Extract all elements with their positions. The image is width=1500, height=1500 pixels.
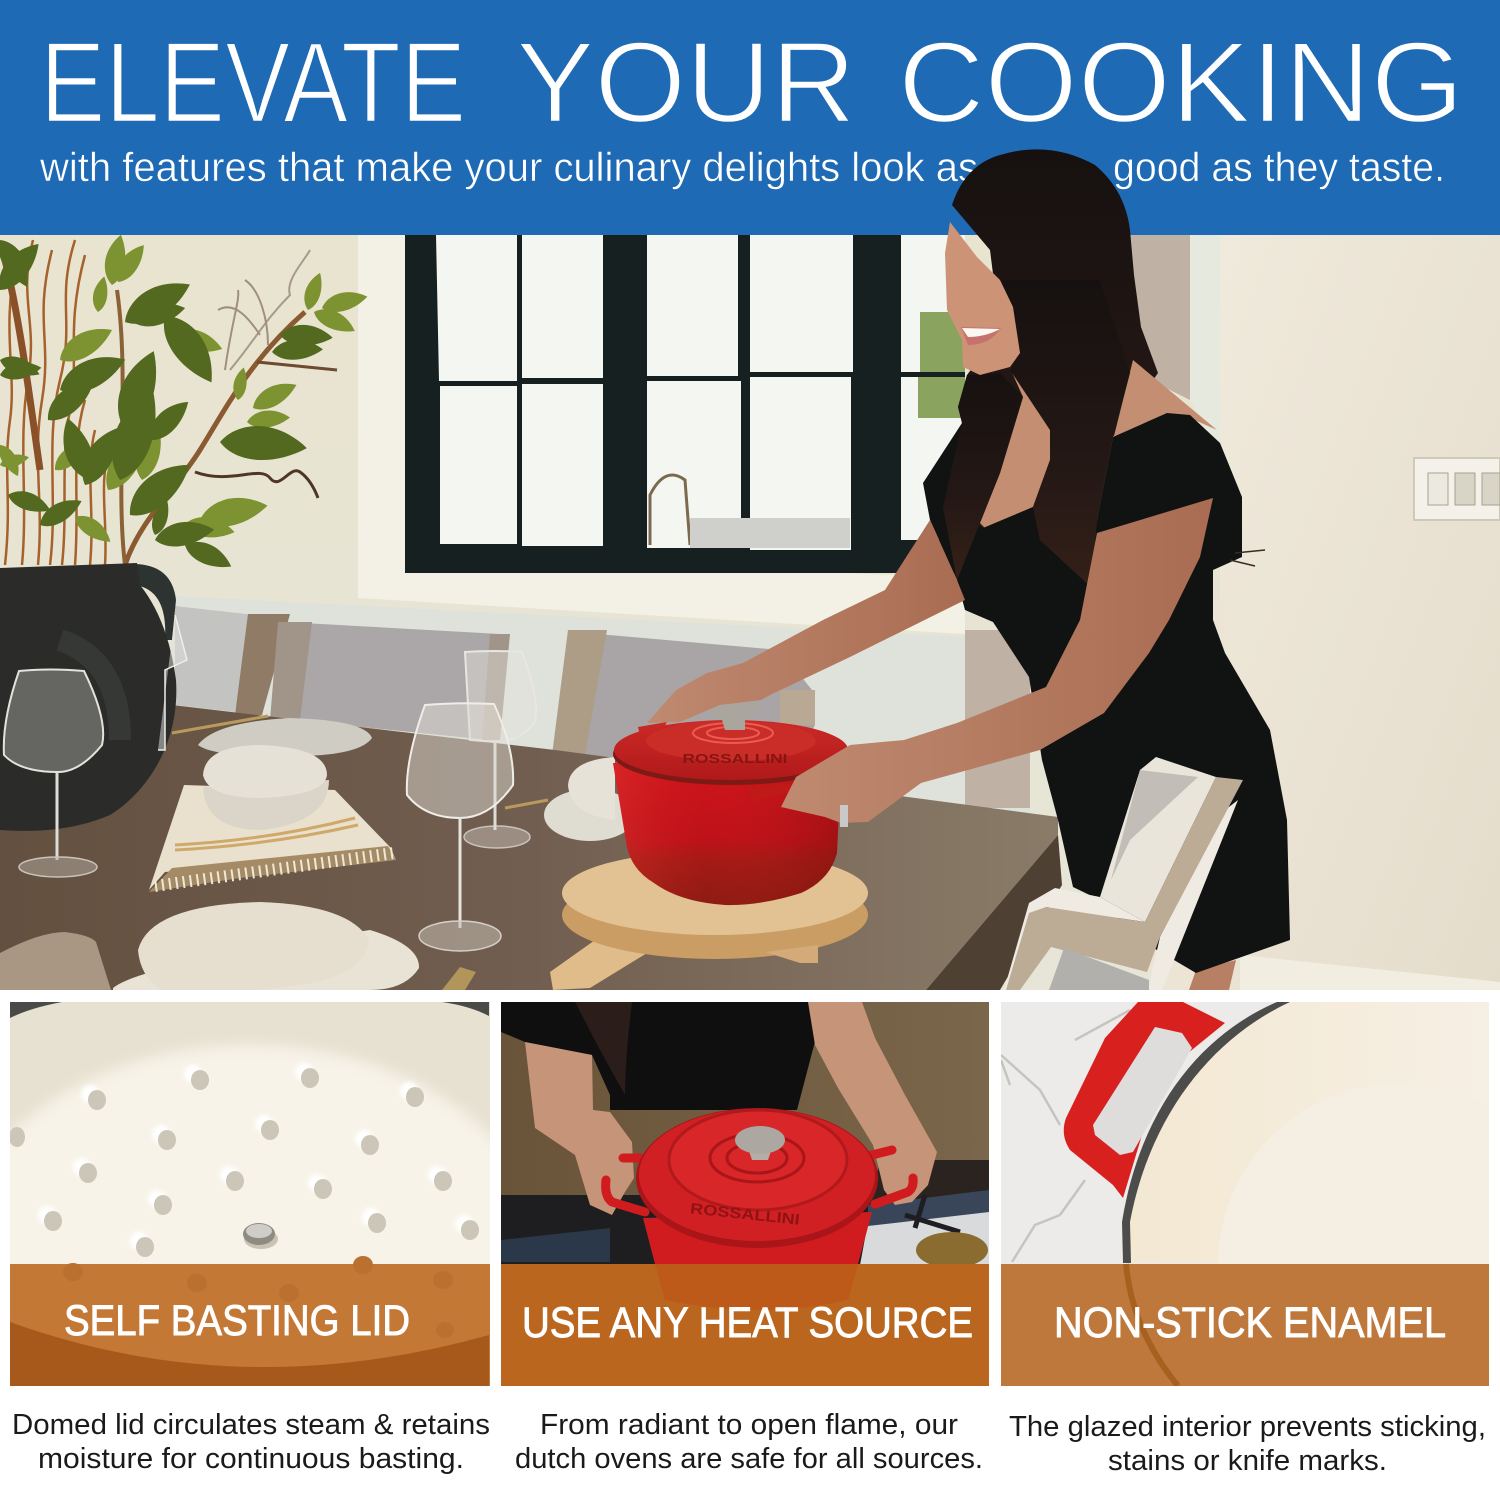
pot rim xyxy=(1122,1002,1489,1263)
caption: any heat source xyxy=(515,1409,983,1475)
caption: self basting lid: moisture for continuous basting. xyxy=(38,1443,464,1475)
lid interior photo xyxy=(10,1002,490,1386)
hair back xyxy=(943,149,1158,593)
pot handle xyxy=(747,783,800,802)
interior floor xyxy=(1218,1083,1500,1447)
wall section beside dress xyxy=(1150,600,1225,990)
caption: any heat source: From radiant to open flame, our xyxy=(540,1409,958,1441)
back arm xyxy=(647,520,965,723)
chair wooden frame xyxy=(1006,777,1243,990)
band shadows xyxy=(655,1264,858,1310)
caption: non-stick enamel: stains or knife marks. xyxy=(1108,1445,1387,1477)
front arm xyxy=(781,498,1213,823)
chair cushion xyxy=(1100,757,1216,922)
title: ELEVATE xyxy=(40,19,466,147)
teeth xyxy=(962,328,1000,337)
stacked bowls xyxy=(203,745,329,830)
hair front: left strand xyxy=(943,373,1023,580)
band dimples xyxy=(63,1256,454,1338)
lid corners xyxy=(10,1002,489,1018)
main photo: dining room scene xyxy=(0,233,1500,990)
orange band xyxy=(10,1264,490,1386)
pot body xyxy=(613,763,841,905)
leg xyxy=(1189,960,1236,990)
curtains xyxy=(965,235,1190,808)
chairs behind table xyxy=(175,606,815,770)
front plate and bowl xyxy=(113,902,476,990)
pot lid xyxy=(636,1108,878,1248)
plant stems xyxy=(5,240,337,565)
front chair right xyxy=(1004,757,1243,990)
caption: non-stick enamel: The glazed interior prevents sticking, xyxy=(1009,1411,1486,1443)
header banner xyxy=(0,0,1500,235)
wine glasses xyxy=(4,615,536,951)
black vase xyxy=(0,563,176,831)
title: YOUR xyxy=(516,19,856,147)
back plate with fork xyxy=(172,716,372,756)
title xyxy=(40,19,1464,147)
lid rim in band xyxy=(10,1322,489,1386)
back wall xyxy=(0,235,1220,990)
subtitle: with features that make your culinary delights look as xyxy=(39,144,978,190)
hair strands xyxy=(1230,550,1265,566)
panel: any heat source xyxy=(501,1002,989,1386)
baseboard xyxy=(1240,955,1500,990)
napkin xyxy=(149,785,396,892)
handle opening xyxy=(1093,1027,1192,1155)
title: COOKING xyxy=(898,19,1464,147)
forearms and hands xyxy=(525,1002,937,1215)
shoulder and neck xyxy=(980,360,1217,528)
stove xyxy=(501,1160,989,1268)
red dutch oven xyxy=(613,695,849,905)
hair front: main fall xyxy=(1000,280,1130,593)
right place setting xyxy=(505,757,636,841)
panel: self basting lid xyxy=(0,1002,550,1495)
band label: SELF BASTING LID xyxy=(64,1297,410,1345)
window xyxy=(405,235,965,573)
window casing xyxy=(358,235,965,634)
woman xyxy=(647,149,1290,990)
lid screw xyxy=(243,1223,278,1249)
pot body xyxy=(643,1212,872,1264)
panel: non-stick enamel xyxy=(1001,1002,1500,1447)
caption: non-stick enamel xyxy=(1009,1411,1486,1477)
table side xyxy=(926,835,1062,990)
front left chair xyxy=(0,932,111,990)
kitchen backdrop xyxy=(501,1002,989,1202)
far handle xyxy=(638,722,667,732)
marble counter xyxy=(1001,1002,1489,1386)
smile xyxy=(961,327,1001,345)
rim through band xyxy=(1126,1264,1178,1386)
orange band xyxy=(501,1264,989,1386)
plant leaves: bright xyxy=(0,233,369,548)
lid knob xyxy=(708,701,758,730)
ring xyxy=(840,805,848,827)
band label: NON-STICK ENAMEL xyxy=(1054,1299,1446,1347)
lid dimples xyxy=(9,1063,479,1257)
red handle xyxy=(1064,1002,1225,1198)
lid brand: ROSSALLINI xyxy=(689,1200,801,1229)
caption: self basting lid xyxy=(12,1409,490,1475)
pot handles xyxy=(606,1150,913,1212)
chair outer white xyxy=(1004,800,1238,990)
chair inner grey xyxy=(1111,770,1198,880)
pot interior xyxy=(1130,1002,1489,1263)
dining table xyxy=(0,705,1058,990)
band label: USE ANY HEAT SOURCE xyxy=(522,1299,973,1347)
caption: any heat source: dutch ovens are safe for all sources. xyxy=(515,1443,983,1475)
wooden board xyxy=(550,851,868,990)
black dress xyxy=(923,413,1290,973)
subtitle: good as they taste. xyxy=(1113,144,1445,190)
lid xyxy=(613,750,801,785)
wall below window xyxy=(176,596,965,736)
orange band xyxy=(1001,1264,1489,1386)
subtitle xyxy=(39,144,1445,190)
right wall xyxy=(1220,235,1500,990)
light switch plate xyxy=(1414,458,1500,520)
plant leaves: dark xyxy=(0,234,333,575)
black top xyxy=(501,1002,820,1110)
face xyxy=(945,222,1020,375)
lid brand: ROSSALLINI xyxy=(682,751,788,766)
window trim right xyxy=(1190,235,1220,455)
pot knob xyxy=(735,1126,785,1160)
hair strand xyxy=(575,1002,632,1095)
caption: self basting lid: Domed lid circulates steam & retains xyxy=(12,1409,490,1441)
chair seat fabric xyxy=(1049,948,1149,990)
